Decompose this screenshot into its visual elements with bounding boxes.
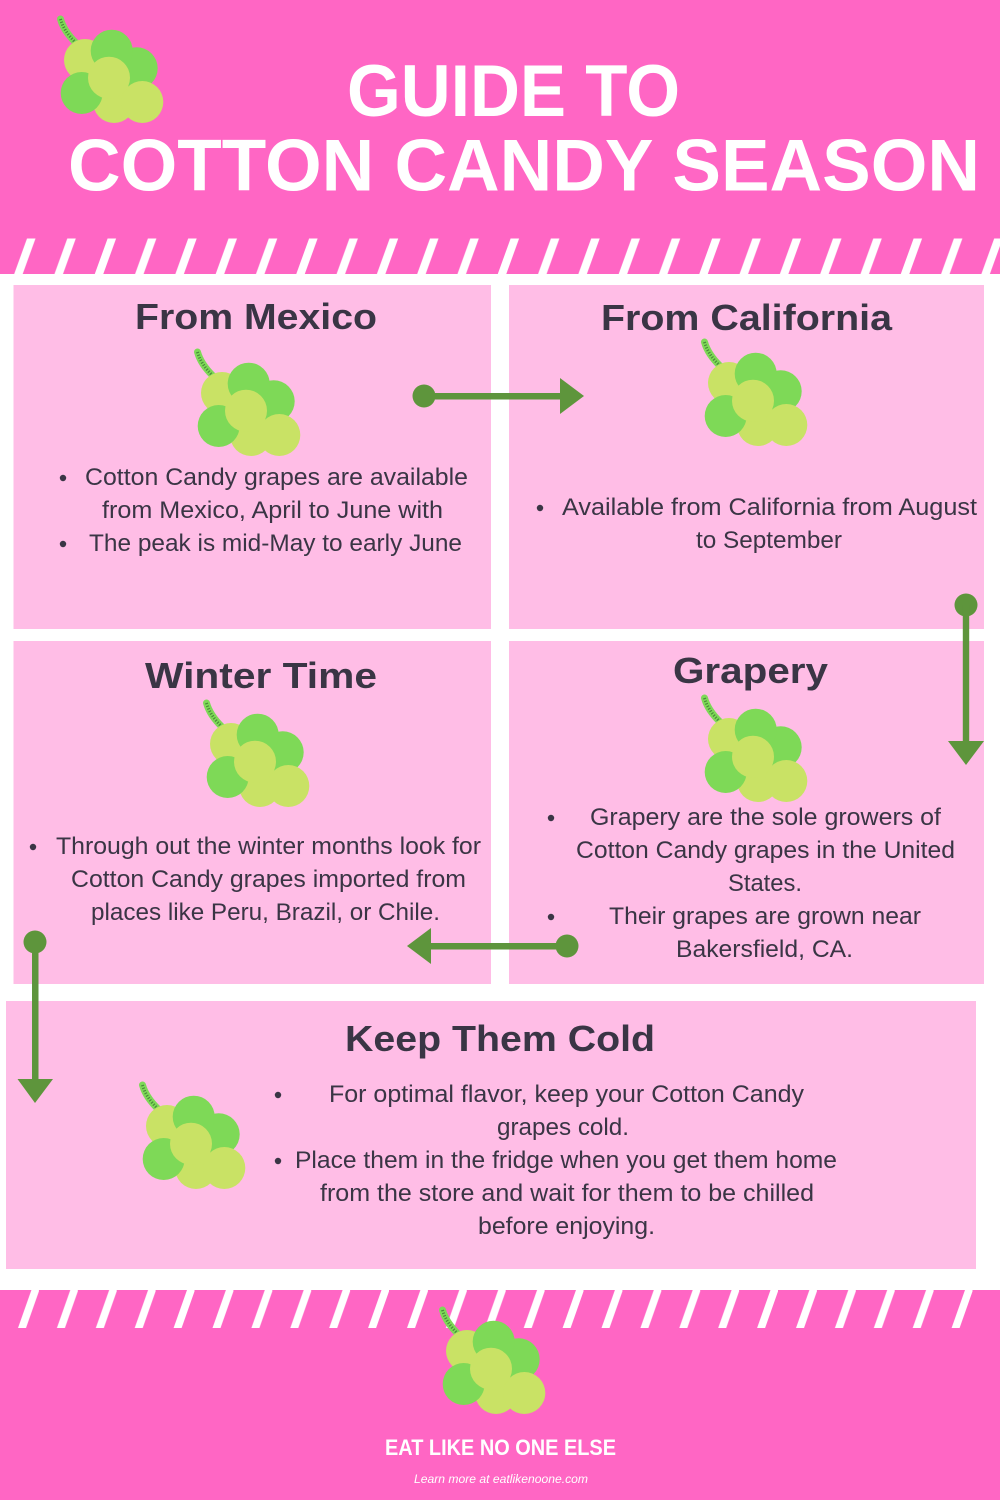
text: winter bullets <box>30 833 481 926</box>
text: keep cold bullets: For optimal flavor, keep your Cotton Candy <box>329 1081 804 1108</box>
text: California bullets: Available from California from August <box>562 494 977 521</box>
icon: keep cold grapes <box>142 1085 245 1189</box>
text: Grapery bullets: Cotton Candy grapes in the United <box>576 837 955 864</box>
panel: Grapery <box>509 641 984 984</box>
arrow: California to Grapery <box>948 594 984 765</box>
header banner <box>0 0 1000 274</box>
icon: Mexico grapes <box>198 352 300 456</box>
text: Grapery bullets <box>548 804 955 963</box>
panel: from Mexico <box>14 285 491 629</box>
text: California bullets: to September <box>696 527 842 554</box>
text: keep cold bullets: from the store and wait for them to be chilled <box>320 1180 814 1207</box>
arrow: Mexico to California <box>412 378 584 414</box>
icon: header grapes <box>60 19 163 123</box>
footer link text: Learn more at eatlikenoone.com <box>414 1474 588 1486</box>
text: keep cold bullets: grapes cold. <box>497 1114 629 1141</box>
title <box>68 51 980 206</box>
footer banner <box>0 1290 1000 1500</box>
text: Grapery bullets: States. <box>728 870 802 897</box>
panel: keep them cold <box>6 1001 976 1269</box>
text: keep cold bullets: before enjoying. <box>478 1213 655 1240</box>
icon: footer grapes <box>442 1310 545 1414</box>
icon: winter grapes <box>206 703 309 807</box>
title: COTTON CANDY SEASON <box>68 126 980 206</box>
heading: from California: From California <box>601 297 893 338</box>
panel: from California <box>509 285 984 629</box>
heading: from Mexico: From Mexico <box>135 296 377 337</box>
heading: Grapery: Grapery <box>673 650 828 691</box>
text: Mexico bullets: The peak is mid-May to early June <box>89 530 462 557</box>
icon: Grapery grapes <box>704 698 807 802</box>
text: winter bullets: places like Peru, Brazil, or Chile. <box>91 899 440 926</box>
text: keep cold bullets: Place them in the fridge when you get them home <box>295 1147 837 1174</box>
text: winter bullets: Cotton Candy grapes imported from <box>71 866 466 893</box>
text: California bullets <box>537 494 977 554</box>
text: Mexico bullets <box>60 464 468 557</box>
text: Mexico bullets: from Mexico, April to June with <box>102 497 443 524</box>
text: Mexico bullets: Cotton Candy grapes are available <box>85 464 468 491</box>
title: GUIDE TO <box>347 51 680 132</box>
heading: keep them cold: Keep Them Cold <box>345 1018 655 1059</box>
text: Grapery bullets: Bakersfield, CA. <box>676 936 853 963</box>
text: winter bullets: Through out the winter months look for <box>56 833 481 860</box>
text: Grapery bullets: Their grapes are grown near <box>609 903 921 930</box>
text: Grapery bullets: Grapery are the sole growers of <box>590 804 941 831</box>
panel: winter time <box>14 641 491 984</box>
arrow: Winter Time to Keep Them Cold <box>18 930 53 1103</box>
icon: California grapes <box>704 342 807 446</box>
text: keep cold bullets <box>275 1081 837 1240</box>
arrow: Grapery to Winter Time <box>407 928 578 964</box>
footer brand: EAT LIKE NO ONE ELSE <box>385 1435 616 1460</box>
heading: winter time: Winter Time <box>145 655 377 696</box>
